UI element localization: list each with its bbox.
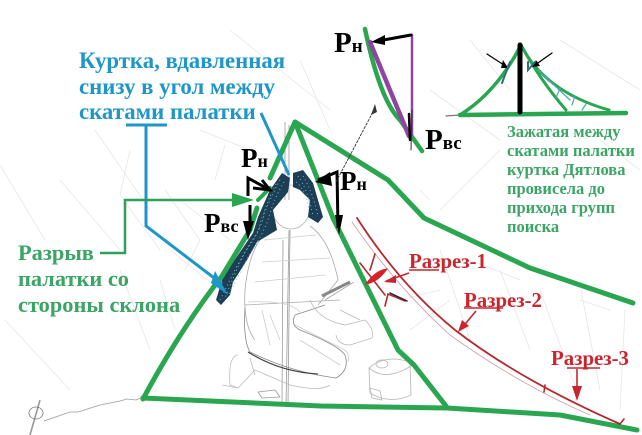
force labels: Рвс — [425, 124, 462, 156]
force labels: Рвс — [204, 208, 238, 238]
thin diagonal arrow — [336, 104, 377, 182]
cut labels: Разрез-2 — [464, 289, 542, 312]
heading: jacket note: Куртка, вдавленная — [79, 48, 285, 73]
blue callout lines — [126, 113, 289, 295]
heading: jacket note: скатами палатки — [79, 99, 256, 124]
red cut arrows — [384, 273, 582, 401]
note: Dyatlov jacket: провисела до — [507, 179, 605, 198]
force labels: Рн — [340, 166, 367, 196]
green tear pointer — [100, 193, 254, 253]
label: tent tear: стороны склона — [18, 292, 180, 317]
jacket squeezed between tent slopes — [216, 170, 323, 305]
cut labels — [409, 250, 629, 370]
tent outline in green — [143, 122, 637, 430]
heading: jacket note — [79, 48, 285, 124]
label: tent tear — [18, 240, 180, 317]
cut labels: Разрез-3 — [551, 347, 629, 370]
label: tent tear: Разрыв — [18, 240, 94, 265]
force labels: Рн — [334, 27, 363, 59]
force arrows on tent — [243, 172, 343, 240]
note: Dyatlov jacket: прихода групп — [507, 198, 616, 217]
label: tent tear: палатки со — [18, 266, 129, 291]
note: Dyatlov jacket: поиска — [507, 217, 559, 236]
force triangle diagram — [365, 29, 422, 151]
sketch: pot — [369, 359, 411, 400]
small tent cross-section — [446, 45, 626, 116]
note: Dyatlov jacket: скатами палатки — [507, 141, 635, 160]
slope line and ski pole — [29, 397, 143, 435]
note: Dyatlov jacket: куртка Дятлова — [507, 160, 625, 179]
force labels: Рн — [241, 143, 268, 173]
red cuts — [352, 218, 624, 424]
note: Dyatlov jacket — [507, 122, 635, 236]
heading: jacket note: снизу в угол между — [79, 74, 276, 99]
force labels — [204, 27, 462, 238]
sketch: seated person — [222, 122, 373, 405]
note: Dyatlov jacket: Зажатая между — [507, 122, 621, 141]
cut labels: Разрез-1 — [409, 250, 487, 273]
